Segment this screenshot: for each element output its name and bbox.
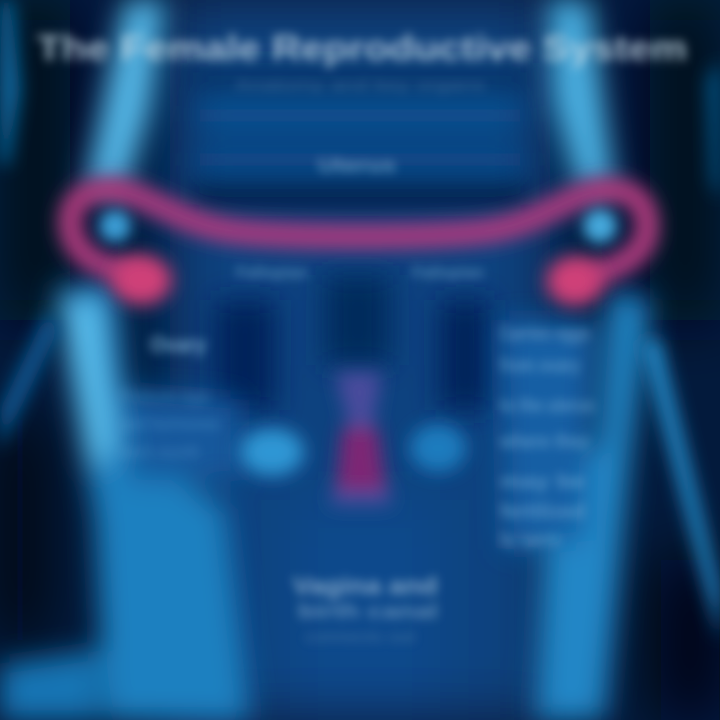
illustration: cervix and vagina [330,372,392,505]
text block: right description: to the uterus [500,395,595,417]
right tube opening [583,209,617,243]
text block: right description: where they [499,431,591,453]
text block: left description: and hormones [120,414,220,434]
text block: right description: fertilized [500,501,585,523]
text block: bottom caption: connects out [305,629,416,646]
left tube opening [99,210,131,242]
title: The Female Reproductive System [37,29,687,68]
label: fallopian tube left: Fallopian [236,263,308,282]
text block: left description: each month [120,442,200,462]
illustration: fallopian tubes and ovaries [70,190,647,306]
label: ovary left: Ovary [150,332,207,357]
text block: right description [499,323,595,551]
text block: left description [120,386,220,462]
text block: bottom caption: Vagina and [292,573,438,600]
right ovary [546,256,602,306]
text block: right description: Carries eggs [500,323,590,345]
text block: bottom caption: birth canal [298,601,438,623]
text block: right description: may be [500,471,585,493]
label: fallopian tube right: Fallopian [412,263,484,282]
text block: right description: from ovary [500,355,581,377]
left body column [0,0,250,720]
text block: right description: by sperm [500,529,560,551]
left ovary [112,255,172,305]
subtitle: Anatomy and key organs [235,77,485,94]
right body column [500,0,650,720]
label: uterus: Uterus [318,155,396,177]
text block: bottom caption [292,573,438,646]
rib bands [190,70,530,410]
text block: left description: Produces eggs [120,386,210,406]
